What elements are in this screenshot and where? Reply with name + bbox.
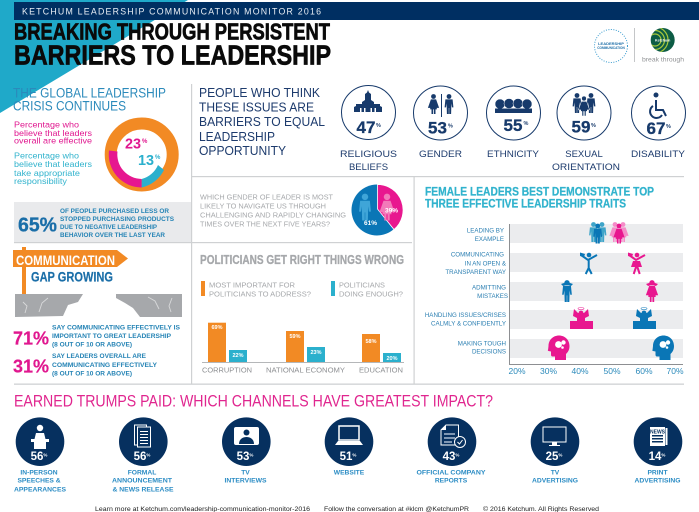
logos (594, 27, 684, 64)
pink legend text: believe that leaders (14, 128, 92, 138)
channel: in-person speeches: IN-PERSON (20, 469, 58, 476)
bar chart: 69% (211, 325, 223, 331)
legend: MOST IMPORTANT FOR (209, 280, 296, 290)
channel: tv interviews: % (249, 452, 253, 458)
teal legend text: Percentage who (14, 150, 79, 160)
heading (425, 186, 654, 210)
donut chart (109, 124, 173, 188)
row labels: COMMUNICATING (451, 252, 504, 258)
barrier: disability: DISABILITY (631, 149, 686, 160)
31% stat (13, 354, 157, 378)
question text: WHICH GENDER OF LEADER IS MOST (200, 194, 334, 202)
barrier: disability (631, 86, 686, 160)
gap heading: GAP GROWING (31, 270, 113, 284)
teal legend text: believe that leaders (14, 159, 92, 169)
legend: POLITICIANS TO ADDRESS? (209, 290, 311, 298)
logos: COMMUNICATION (597, 46, 625, 50)
row labels: TRANSPARENT WAY (445, 269, 506, 276)
barrier: religious beliefs (340, 86, 397, 173)
71% stat: SAY COMMUNICATING EFFECTIVELY IS (52, 326, 180, 332)
question text: CHALLENGING AND RAPIDLY CHANGING (200, 212, 346, 219)
callout: 65%: OF PEOPLE PURCHASED LESS OR (60, 209, 170, 215)
question text: LIKELY TO NAVIGATE US THROUGH (200, 203, 326, 210)
channel: tv interviews: 53 (237, 451, 249, 463)
bar chart: 58% (365, 339, 377, 345)
channel: website: % (352, 452, 356, 458)
pink legend text: Percentage who (14, 120, 79, 130)
legend: DOING ENOUGH? (339, 290, 403, 298)
title: BREAKING THROUGH PERSISTENT (14, 18, 330, 44)
bar chart: EDUCATION (359, 366, 403, 374)
71% stat: (8 OUT OF 10 OR ABOVE) (52, 343, 132, 349)
channel: in-person speeches: 56 (31, 451, 43, 463)
bar chart (202, 323, 404, 374)
row labels: ADMITTING (472, 284, 506, 292)
row 1 icons: leading by example (589, 222, 629, 244)
header bar: KETCHUM LEADERSHIP COMMUNICATION MONITOR 2016 (22, 6, 321, 16)
donut chart: 23 (125, 136, 141, 152)
barrier: religious beliefs: RELIGIOUS (340, 149, 397, 160)
pie chart: 61% (364, 220, 377, 227)
pink legend text (14, 120, 92, 146)
channel: formal announcement (112, 417, 174, 493)
panel: barriers heading: THESE ISSUES ARE (199, 100, 314, 114)
31% stat: SAY LEADERS OVERALL ARE (52, 354, 146, 360)
channel: in-person speeches: % (43, 452, 47, 458)
row labels: MAKING TOUGH (458, 341, 506, 348)
channel: in-person speeches (14, 417, 67, 493)
callout: 65% (14, 202, 191, 242)
teal legend text: take appropriate (14, 168, 80, 178)
callout: 65%: DUE TO NEGATIVE LEADERSHIP (60, 225, 157, 231)
barrier: religious beliefs: % (376, 123, 381, 129)
barrier: ethnicity: % (524, 121, 528, 127)
31% stat: 31% (13, 356, 49, 376)
71% stat (13, 326, 180, 349)
channel: print advertising: NEWS (650, 430, 666, 436)
channel: print advertising: ADVERTISING (634, 477, 680, 484)
callout: 65%: BEHAVIOR OVER THE LAST YEAR (60, 233, 166, 239)
panel: barriers heading (199, 85, 325, 158)
bar chart: 59% (289, 334, 301, 340)
panel: barriers heading: LEADERSHIP (199, 129, 275, 144)
axis: 50% (603, 366, 621, 376)
channel: official company reports: REPORTS (435, 477, 468, 484)
question text: TIMES OVER THE NEXT FIVE YEARS? (200, 221, 330, 228)
channel: tv advertising: TV (551, 469, 560, 476)
barrier: gender: % (448, 124, 453, 130)
barrier: gender (414, 86, 468, 160)
channel: tv advertising: % (558, 452, 562, 458)
barrier: ethnicity: ETHNICITY (487, 149, 540, 160)
title: BARRIERS TO LEADERSHIP (14, 40, 331, 70)
barrier: sexual orientation: SEXUAL (565, 149, 603, 160)
header bar (14, 2, 699, 20)
donut chart: % (155, 155, 161, 161)
row 5 icons: tough decisions (548, 336, 674, 360)
barrier: sexual orientation: 59 (572, 118, 590, 136)
barrier: sexual orientation: % (591, 123, 596, 129)
row 3 icons: admitting mistakes (561, 280, 658, 302)
channel: website (325, 417, 373, 476)
channel: print advertising: 14 (649, 451, 661, 463)
barrier: gender: 53 (428, 118, 447, 138)
channel: in-person speeches: APPEARANCES (14, 486, 67, 493)
row labels: CALMLY & CONFIDENTLY (431, 320, 506, 328)
channel: official company reports: OFFICIAL COMPANY (416, 469, 486, 476)
channel: formal announcement: FORMAL (128, 469, 156, 476)
row labels (425, 228, 508, 356)
channel: website: 51 (340, 451, 352, 463)
section dividers (14, 84, 684, 385)
cliffs (15, 294, 182, 317)
teal legend text: responsibility (14, 176, 68, 186)
footer (95, 505, 600, 512)
donut chart: 13 (138, 152, 154, 169)
pie chart (352, 184, 403, 236)
pie chart: 39% (385, 208, 398, 214)
signpost: COMMUNICATION (16, 253, 115, 268)
heading: FEMALE LEADERS BEST DEMONSTRATE TOP (425, 186, 654, 198)
heading: THREE EFFECTIVE LEADERSHIP TRAITS (425, 198, 626, 210)
row 2 icons: communicating (580, 252, 645, 274)
axis (508, 224, 684, 376)
pink legend text: overall are effective (14, 136, 92, 146)
row stripes (510, 224, 683, 358)
channel: formal announcement: & NEWS RELEASE (112, 486, 174, 493)
channel: formal announcement: 56 (134, 451, 146, 463)
row labels: MISTAKES (477, 293, 508, 300)
channel: website: WEBSITE (334, 469, 365, 476)
channel: tv advertising: ADVERTISING (532, 477, 578, 484)
channel: tv interviews: INTERVIEWS (224, 477, 267, 484)
bar chart: 23% (310, 350, 322, 356)
panel: female leaders traits (425, 186, 684, 376)
row 4 icons: handling crises (570, 308, 656, 329)
channel: in-person speeches: SPEECHES & (17, 477, 61, 484)
teal legend text (14, 150, 92, 186)
channels heading: EARNED TRUMPS PAID: WHICH CHANNELS HAVE GREATEST IMPACT? (14, 392, 493, 410)
panel: barriers heading: PEOPLE WHO THINK (199, 85, 320, 100)
bar chart: 22% (232, 353, 244, 359)
title (14, 18, 331, 70)
heading (13, 86, 166, 114)
panel: global leadership crisis (13, 86, 191, 242)
barrier: sexual orientation (552, 86, 620, 173)
barrier: disability: % (666, 124, 671, 130)
71% stat: 71% (13, 328, 49, 348)
bar chart: CORRUPTION (202, 366, 252, 374)
channel: formal announcement: % (146, 452, 150, 458)
channel: tv interviews: TV (241, 469, 250, 476)
channel: tv interviews (222, 417, 271, 484)
71% stat: IMPORTANT TO GREAT LEADERSHIP (52, 334, 171, 340)
axis: 20% (508, 366, 526, 376)
donut chart: % (142, 139, 148, 145)
signpost (13, 247, 128, 294)
panel: communication gap (13, 247, 182, 378)
channel: formal announcement: ANNOUNCEMENT (112, 477, 173, 484)
barrier: religious beliefs: 47 (357, 118, 375, 137)
callout: 65%: STOPPED PURCHASING PRODUCTS (60, 217, 174, 223)
channel: tv advertising (531, 417, 579, 484)
31% stat: (8 OUT OF 10 OR ABOVE) (52, 372, 132, 378)
row labels: IN AN OPEN & (465, 260, 507, 268)
heading: POLITICIANS GET RIGHT THINGS WRONG (200, 253, 404, 267)
bar chart: 20% (386, 356, 398, 362)
axis: 30% (540, 366, 557, 376)
panel: politicians (200, 253, 404, 374)
callout: 65%: 65% (18, 214, 57, 236)
channel: print advertising: % (661, 452, 665, 458)
legend: POLITICIANS (339, 280, 385, 290)
logos: LEADERSHIP (598, 41, 624, 46)
barrier: ethnicity (486, 86, 540, 160)
background triangle (0, 0, 188, 113)
barrier: disability: 67 (647, 119, 665, 138)
panel: barriers heading: BARRIERS TO EQUAL (199, 114, 325, 129)
axis: 60% (635, 366, 653, 376)
question text (200, 194, 346, 228)
channel: official company reports: % (455, 452, 459, 458)
barrier: ethnicity: 55 (504, 116, 522, 135)
channel: print advertising (634, 417, 682, 484)
row labels: EXAMPLE (475, 236, 504, 243)
channel: official company reports (416, 417, 486, 484)
logos: Ketchum (655, 38, 670, 42)
31% stat: COMMUNICATING EFFECTIVELY (52, 363, 157, 369)
heading: CRISIS CONTINUES (13, 98, 126, 114)
heading: THE GLOBAL LEADERSHIP (13, 86, 166, 100)
row labels: DECISIONS (472, 348, 506, 356)
bar chart: NATIONAL ECONOMY (266, 366, 345, 374)
row labels: LEADING BY (467, 228, 504, 235)
channel: print advertising: PRINT (647, 469, 668, 476)
channel: tv advertising: 25 (546, 451, 558, 463)
legend (201, 280, 403, 298)
logos: break through (642, 56, 684, 64)
barrier: sexual orientation: ORIENTATION (552, 162, 620, 173)
row labels: HANDLING ISSUES/CRISES (425, 312, 506, 319)
barrier: religious beliefs: BELIEFS (349, 162, 388, 173)
panel: barriers heading: OPPORTUNITY (199, 143, 286, 158)
panel: gender question (200, 184, 403, 236)
channel: official company reports: 43 (443, 451, 455, 463)
axis: 40% (571, 366, 589, 376)
axis: 70% (666, 366, 684, 376)
barrier: gender: GENDER (419, 149, 462, 160)
